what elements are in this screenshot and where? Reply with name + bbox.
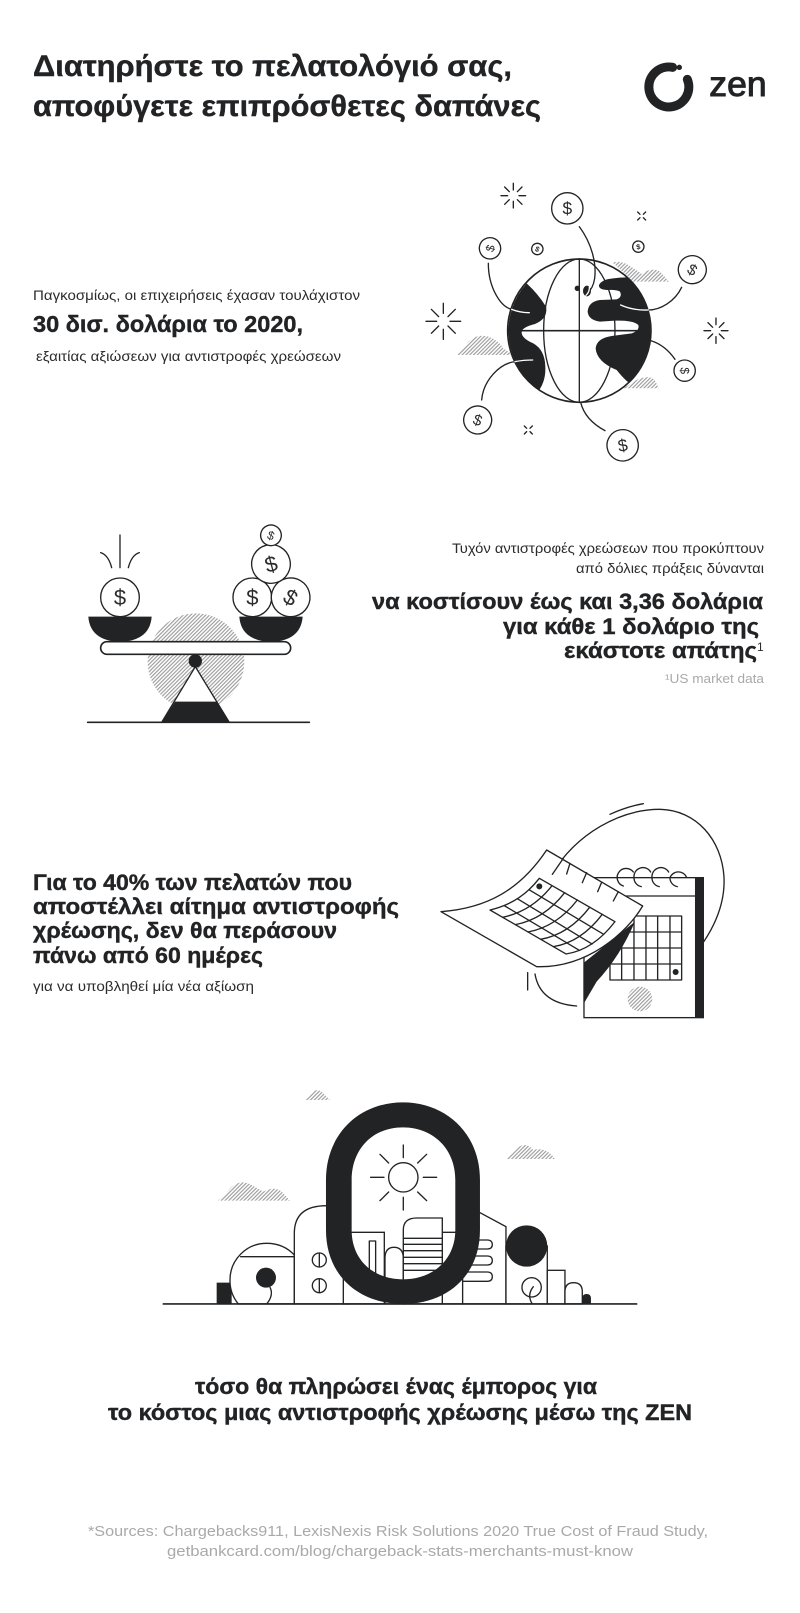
text block: global losses: 30 δισ. δολάρια το 2020, bbox=[33, 311, 303, 337]
coin: small right: $ bbox=[636, 242, 641, 252]
text block: cost of fraud: από δόλιες πράξεις δύνανται bbox=[576, 561, 764, 576]
text block: merchant cost bbox=[108, 1374, 692, 1425]
buildings bbox=[217, 1206, 591, 1304]
coin: upper right: $ bbox=[684, 261, 700, 280]
title bbox=[33, 50, 541, 123]
coin: small right bbox=[632, 240, 645, 253]
text block: cost of fraud: για κάθε 1 δολάριο της bbox=[503, 614, 759, 639]
big zero bbox=[326, 1102, 480, 1304]
coin: right pan right bbox=[264, 571, 317, 624]
coin: right pan left bbox=[233, 578, 272, 617]
text block: 60 days: αποστέλλει αίτημα αντιστροφής bbox=[33, 894, 399, 919]
title: Διατηρήστε το πελατολόγιό σας, bbox=[33, 50, 512, 83]
text block: 60 days: χρέωσης, δεν θα περάσουν bbox=[33, 918, 337, 943]
text block: 60 days: Για το 40% των πελατών που bbox=[33, 870, 352, 895]
text block: 60 days: για να υποβληθεί μία νέα αξίωση bbox=[33, 979, 254, 994]
title: αποφύγετε επιπρόσθετες δαπάνες bbox=[33, 90, 541, 123]
coin: top: $ bbox=[562, 198, 572, 218]
text block: global losses: Παγκοσμίως, οι επιχειρήσεις έχασαν τουλάχιστον bbox=[33, 288, 360, 303]
logo: zen bbox=[649, 65, 767, 107]
sources: getbankcard.com/blog/chargeback-stats-merchants-must-know bbox=[167, 1544, 634, 1560]
sun bbox=[371, 1145, 437, 1210]
coin: upper right bbox=[673, 251, 711, 289]
text block: cost of fraud: εκάστοτε απάτης bbox=[564, 638, 757, 663]
text block: cost of fraud bbox=[372, 541, 764, 686]
coin: top bbox=[552, 193, 583, 224]
illustration: globe with coins bbox=[426, 183, 728, 463]
coin: right: $ bbox=[677, 367, 691, 374]
logo: zen: zen bbox=[709, 65, 767, 104]
text block: cost of fraud: να κοστίσουν έως και 3,36 δολάρια bbox=[372, 589, 763, 614]
illustration: balance scale with coins bbox=[88, 522, 317, 722]
coin: upper left bbox=[477, 235, 503, 261]
coin: right pan top: $ bbox=[262, 550, 280, 578]
text block: 60 days bbox=[33, 870, 399, 994]
coin: upper left: $ bbox=[483, 243, 498, 253]
coin: left pan bbox=[101, 578, 139, 617]
coin: right pan right: $ bbox=[279, 584, 302, 611]
coin: bottom bbox=[604, 427, 641, 463]
coin: right bbox=[674, 360, 695, 381]
coin: right pan left: $ bbox=[246, 585, 258, 610]
text block: 60 days: πάνω από 60 ημέρες bbox=[33, 943, 263, 968]
falling motion lines bbox=[101, 535, 139, 568]
coin: small left: $ bbox=[534, 244, 541, 254]
coin: bottom: $ bbox=[616, 435, 629, 456]
coin: small on top bbox=[258, 522, 284, 549]
text block: cost of fraud: Τυχόν αντιστροφές χρεώσεων που προκύπτουν bbox=[452, 541, 764, 556]
sparkles bbox=[426, 183, 728, 434]
sources bbox=[88, 1524, 708, 1560]
text block: cost of fraud: ¹US market data bbox=[665, 672, 764, 686]
illustration: calendar with flipping page bbox=[441, 804, 724, 1018]
sources: *Sources: Chargebacks911, LexisNexis Risk Solutions 2020 True Cost of Fraud Study, bbox=[88, 1524, 708, 1540]
bowl: left bbox=[88, 617, 152, 642]
clouds bbox=[218, 1090, 555, 1201]
illustration: city inside big zero bbox=[163, 1090, 637, 1304]
coin: lower left bbox=[460, 402, 496, 438]
flipping page bbox=[441, 850, 643, 967]
back calendar sheet bbox=[584, 878, 703, 1018]
text block: merchant cost: τόσο θα πληρώσει ένας έμπορος για bbox=[195, 1374, 597, 1399]
coin: small on top: $ bbox=[265, 528, 277, 543]
text block: global losses: εξαιτίας αξιώσεων για αντιστροφές χρεώσεων bbox=[36, 349, 341, 364]
coin: right pan top bbox=[247, 540, 295, 588]
coin: small left bbox=[530, 241, 545, 257]
text block: merchant cost: το κόστος μιας αντιστροφής χρέωσης μέσω της ZEN bbox=[108, 1400, 692, 1425]
text block: cost of fraud: 1 bbox=[757, 640, 764, 654]
coin: left pan: $ bbox=[114, 585, 126, 610]
coin: lower left: $ bbox=[470, 411, 485, 430]
bowl: right bbox=[239, 617, 303, 642]
text block: global losses bbox=[33, 288, 360, 364]
